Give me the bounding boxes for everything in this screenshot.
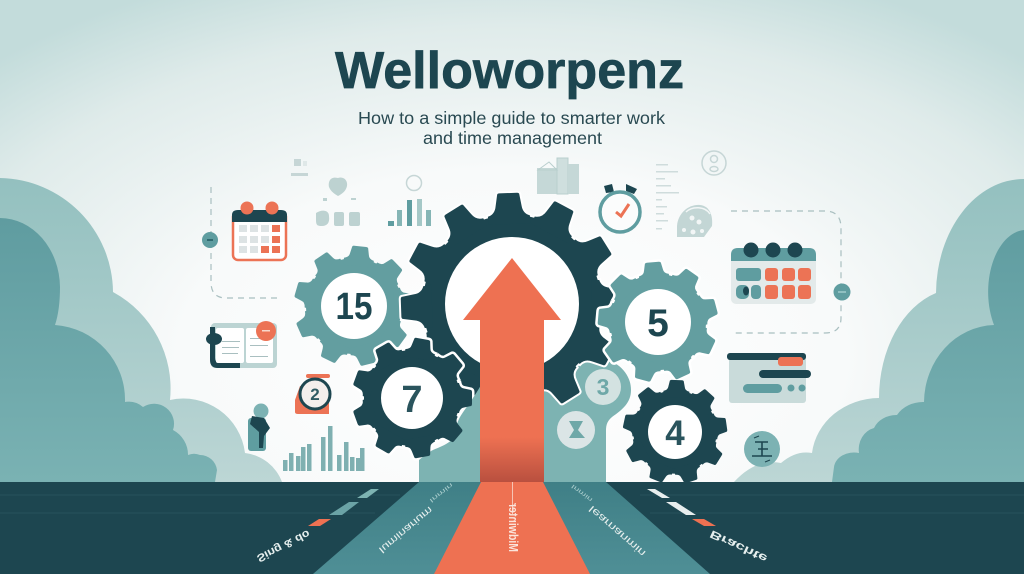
teal panel beside arrow left xyxy=(419,385,481,482)
icon: faded text list xyxy=(656,164,679,230)
subtitle xyxy=(358,108,665,148)
road labels: Brachte xyxy=(708,527,769,564)
road labels: Inmin xyxy=(571,482,594,502)
arrow xyxy=(463,258,561,482)
gear 5: 5 xyxy=(647,302,669,345)
road centre line xyxy=(511,482,514,514)
road labels: Midwinter xyxy=(506,503,521,552)
icon: faded face circle xyxy=(702,151,726,175)
road labels: Sing & do xyxy=(255,527,312,564)
icon: person xyxy=(248,404,270,451)
gear 15: 15 xyxy=(336,286,372,328)
icon circle lower xyxy=(557,411,595,449)
dashed connector left xyxy=(211,187,278,298)
icon: teal calendar xyxy=(731,242,816,304)
teal panel beside arrow right xyxy=(543,358,631,482)
icon: red calendar xyxy=(232,202,287,260)
road labels: Iearnanmin xyxy=(587,503,648,558)
gear 7 halo xyxy=(341,328,483,469)
road labels: Inmin xyxy=(428,481,454,503)
number circle 3: 3 xyxy=(597,374,609,400)
icon: stopwatch xyxy=(600,184,640,232)
icon: alarm clock 2: 2 xyxy=(310,385,320,404)
gear 7: 7 xyxy=(401,379,423,421)
icon: faded document chart xyxy=(537,158,579,194)
icon: heart and apples xyxy=(316,178,360,226)
icon: alarm clock 2 xyxy=(295,374,330,414)
left connector badge xyxy=(202,232,218,248)
subtitle: How to a simple guide to smarter work xyxy=(358,108,665,128)
road labels xyxy=(255,481,769,564)
road band orange xyxy=(434,482,590,574)
icon: network circle xyxy=(744,431,780,467)
dashed connector right xyxy=(731,211,841,333)
icon: ring above bars xyxy=(406,176,422,190)
chart: small bars top xyxy=(388,199,431,226)
road labels: Iuminarium xyxy=(376,504,434,555)
road dashes right xyxy=(647,489,716,526)
icon: faded gauge xyxy=(677,205,712,237)
icon: faded small block xyxy=(291,159,308,176)
road xyxy=(0,481,1024,574)
gear 7 xyxy=(341,328,483,469)
gear 15 xyxy=(286,240,422,374)
gear large xyxy=(397,189,627,419)
panel: small screen right xyxy=(727,353,811,403)
left clouds xyxy=(0,178,282,482)
gear 5 xyxy=(591,257,725,389)
subtitle: and time management xyxy=(423,128,602,148)
gear 4 xyxy=(620,378,730,487)
title: Welloworpenz xyxy=(335,42,684,100)
road band teal xyxy=(313,482,710,574)
right connector badge xyxy=(834,284,850,300)
chart: bars bottom left xyxy=(283,426,364,471)
icon: open book card xyxy=(206,321,277,368)
gear 4: 4 xyxy=(665,414,685,453)
road dashes left xyxy=(308,489,379,526)
right clouds xyxy=(734,179,1024,482)
